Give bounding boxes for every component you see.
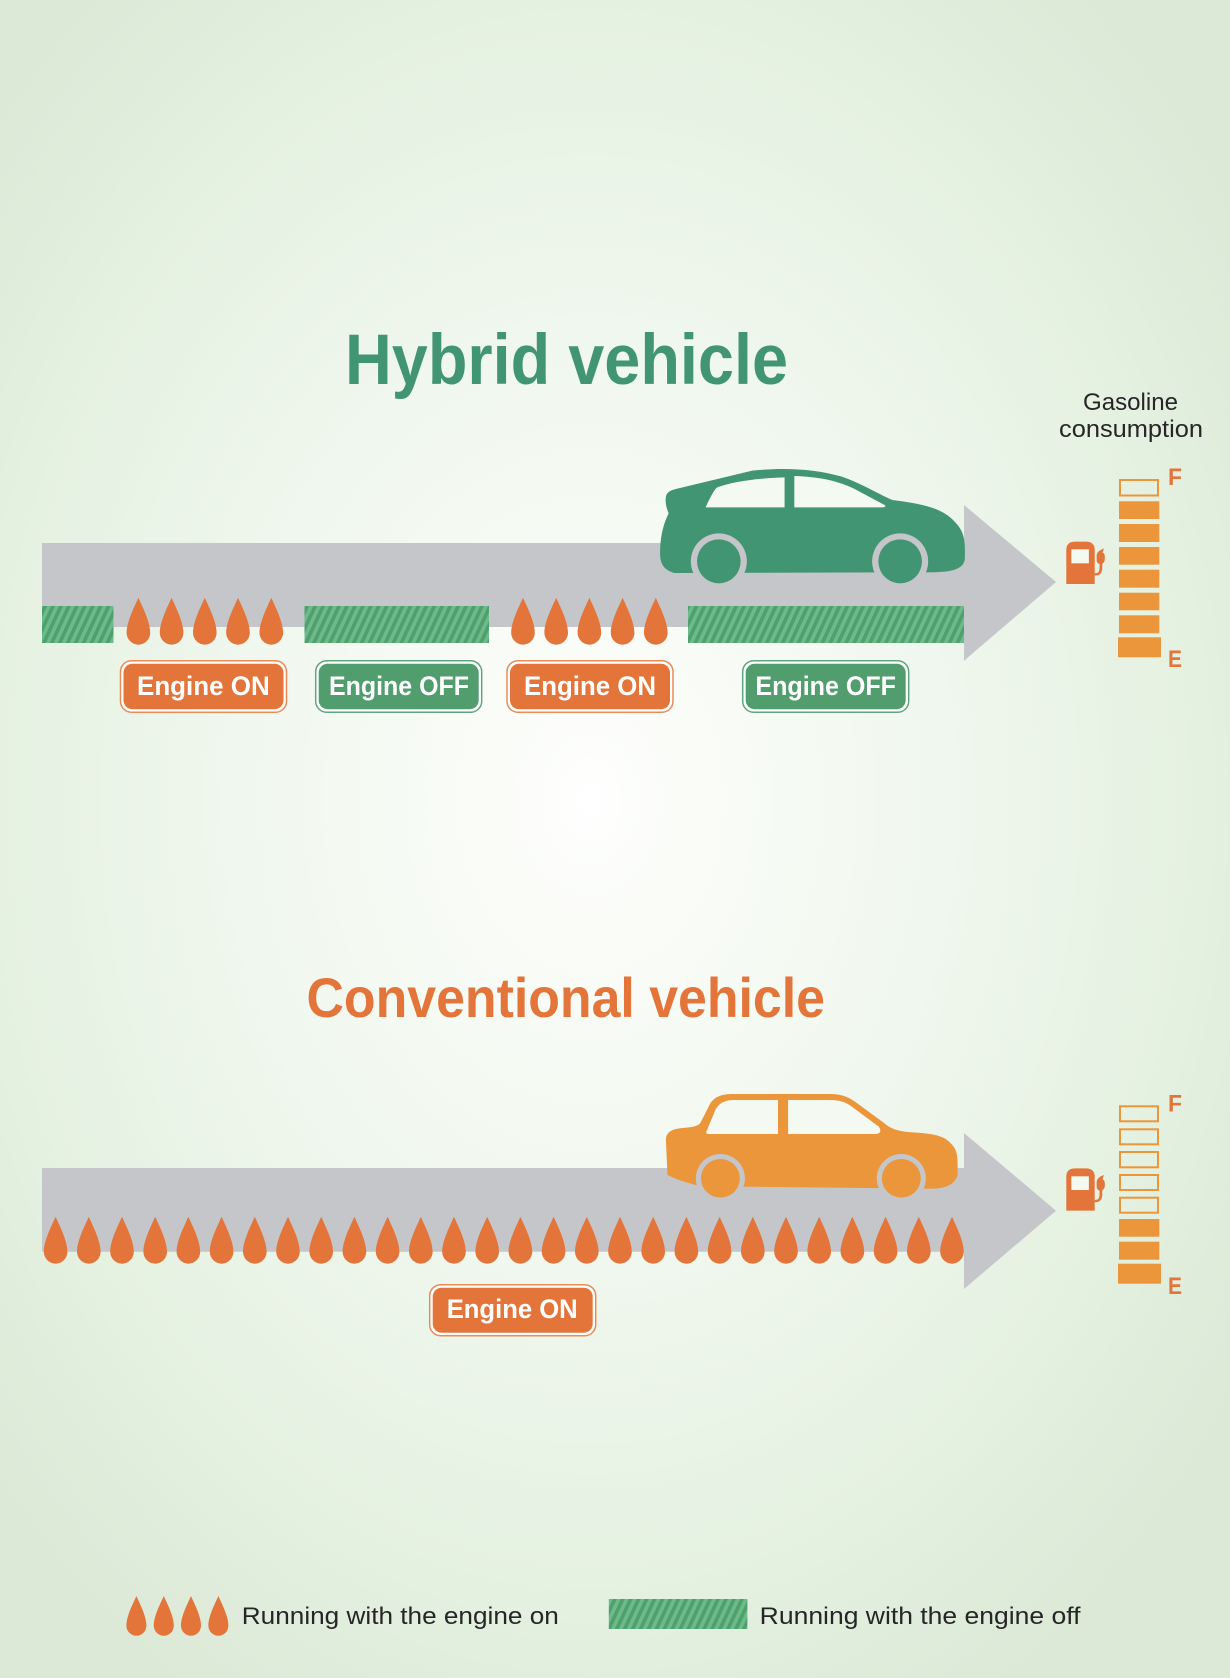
badge: engine on 1 xyxy=(120,661,286,712)
fuel gauge: one of eight empty: E xyxy=(1168,646,1182,673)
panel: hybrid vehicle xyxy=(42,321,1203,712)
fuel drops: engine on throughout xyxy=(44,1217,964,1264)
fuel drops: second engine-on segment xyxy=(511,598,668,645)
fuel gauge: one of eight empty xyxy=(1118,464,1182,673)
legend xyxy=(126,1596,1081,1636)
fuel gauge: five of eight empty: F xyxy=(1168,1091,1182,1118)
badge: engine on 2 xyxy=(507,661,673,712)
legend key: fuel drops xyxy=(126,1596,228,1636)
road arrow xyxy=(42,505,1056,661)
hatched segments: engine off xyxy=(42,606,964,643)
icon: conventional car xyxy=(666,1094,958,1203)
icon: hybrid car xyxy=(660,469,965,589)
badge: engine on 1: Engine ON xyxy=(137,671,270,701)
fuel gauge: one of eight empty: F xyxy=(1168,464,1182,491)
legend key: hatch xyxy=(609,1599,747,1629)
heading: hybrid vehicle: Hybrid vehicle xyxy=(345,321,788,400)
legend text: engine on: Running with the engine on xyxy=(242,1603,559,1630)
badge: engine on: Engine ON xyxy=(447,1294,578,1324)
badge: engine off 1 xyxy=(316,661,482,712)
road arrow xyxy=(42,1133,1056,1289)
badge: engine on xyxy=(430,1285,596,1336)
icon: fuel pump xyxy=(1066,1168,1105,1211)
heading: conventional vehicle: Conventional vehicle xyxy=(306,966,825,1029)
fuel drops: first engine-on segment xyxy=(127,598,283,645)
icon: fuel pump xyxy=(1066,542,1105,584)
label: gasoline consumption: consumption xyxy=(1059,416,1203,443)
fuel gauge: five of eight empty: E xyxy=(1168,1273,1182,1300)
legend text: engine off: Running with the engine off xyxy=(760,1603,1081,1630)
panel: conventional vehicle xyxy=(42,966,1182,1336)
badge: engine on 2: Engine ON xyxy=(524,671,656,701)
badge: engine off 2 xyxy=(743,661,909,712)
label: gasoline consumption: Gasoline xyxy=(1083,389,1178,416)
badge: engine off 1: Engine OFF xyxy=(329,671,469,701)
label: gasoline consumption xyxy=(1059,389,1203,443)
badge: engine off 2: Engine OFF xyxy=(755,671,896,701)
fuel gauge: five of eight empty xyxy=(1118,1091,1182,1300)
